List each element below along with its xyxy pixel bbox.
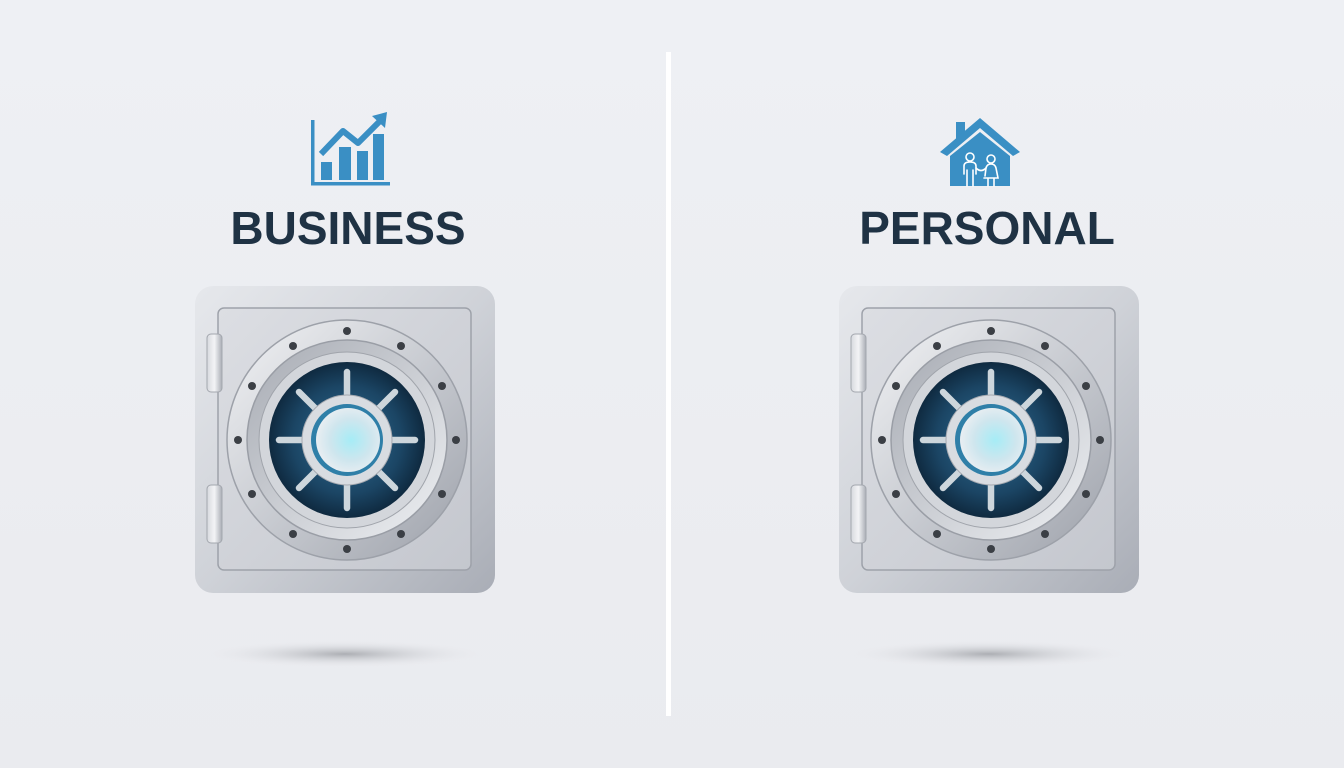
panel: personal — [839, 118, 1139, 668]
icon: house with family — [940, 118, 1020, 186]
heading: personal: PERSONAL — [859, 202, 1115, 254]
shadow — [200, 640, 490, 668]
heading: business: BUSINESS — [230, 202, 466, 254]
vault: personal — [839, 286, 1139, 593]
icon: growth chart — [311, 112, 390, 186]
shadow — [844, 640, 1134, 668]
panel: business — [195, 112, 495, 668]
divider — [666, 52, 671, 716]
vault: business — [195, 286, 495, 593]
